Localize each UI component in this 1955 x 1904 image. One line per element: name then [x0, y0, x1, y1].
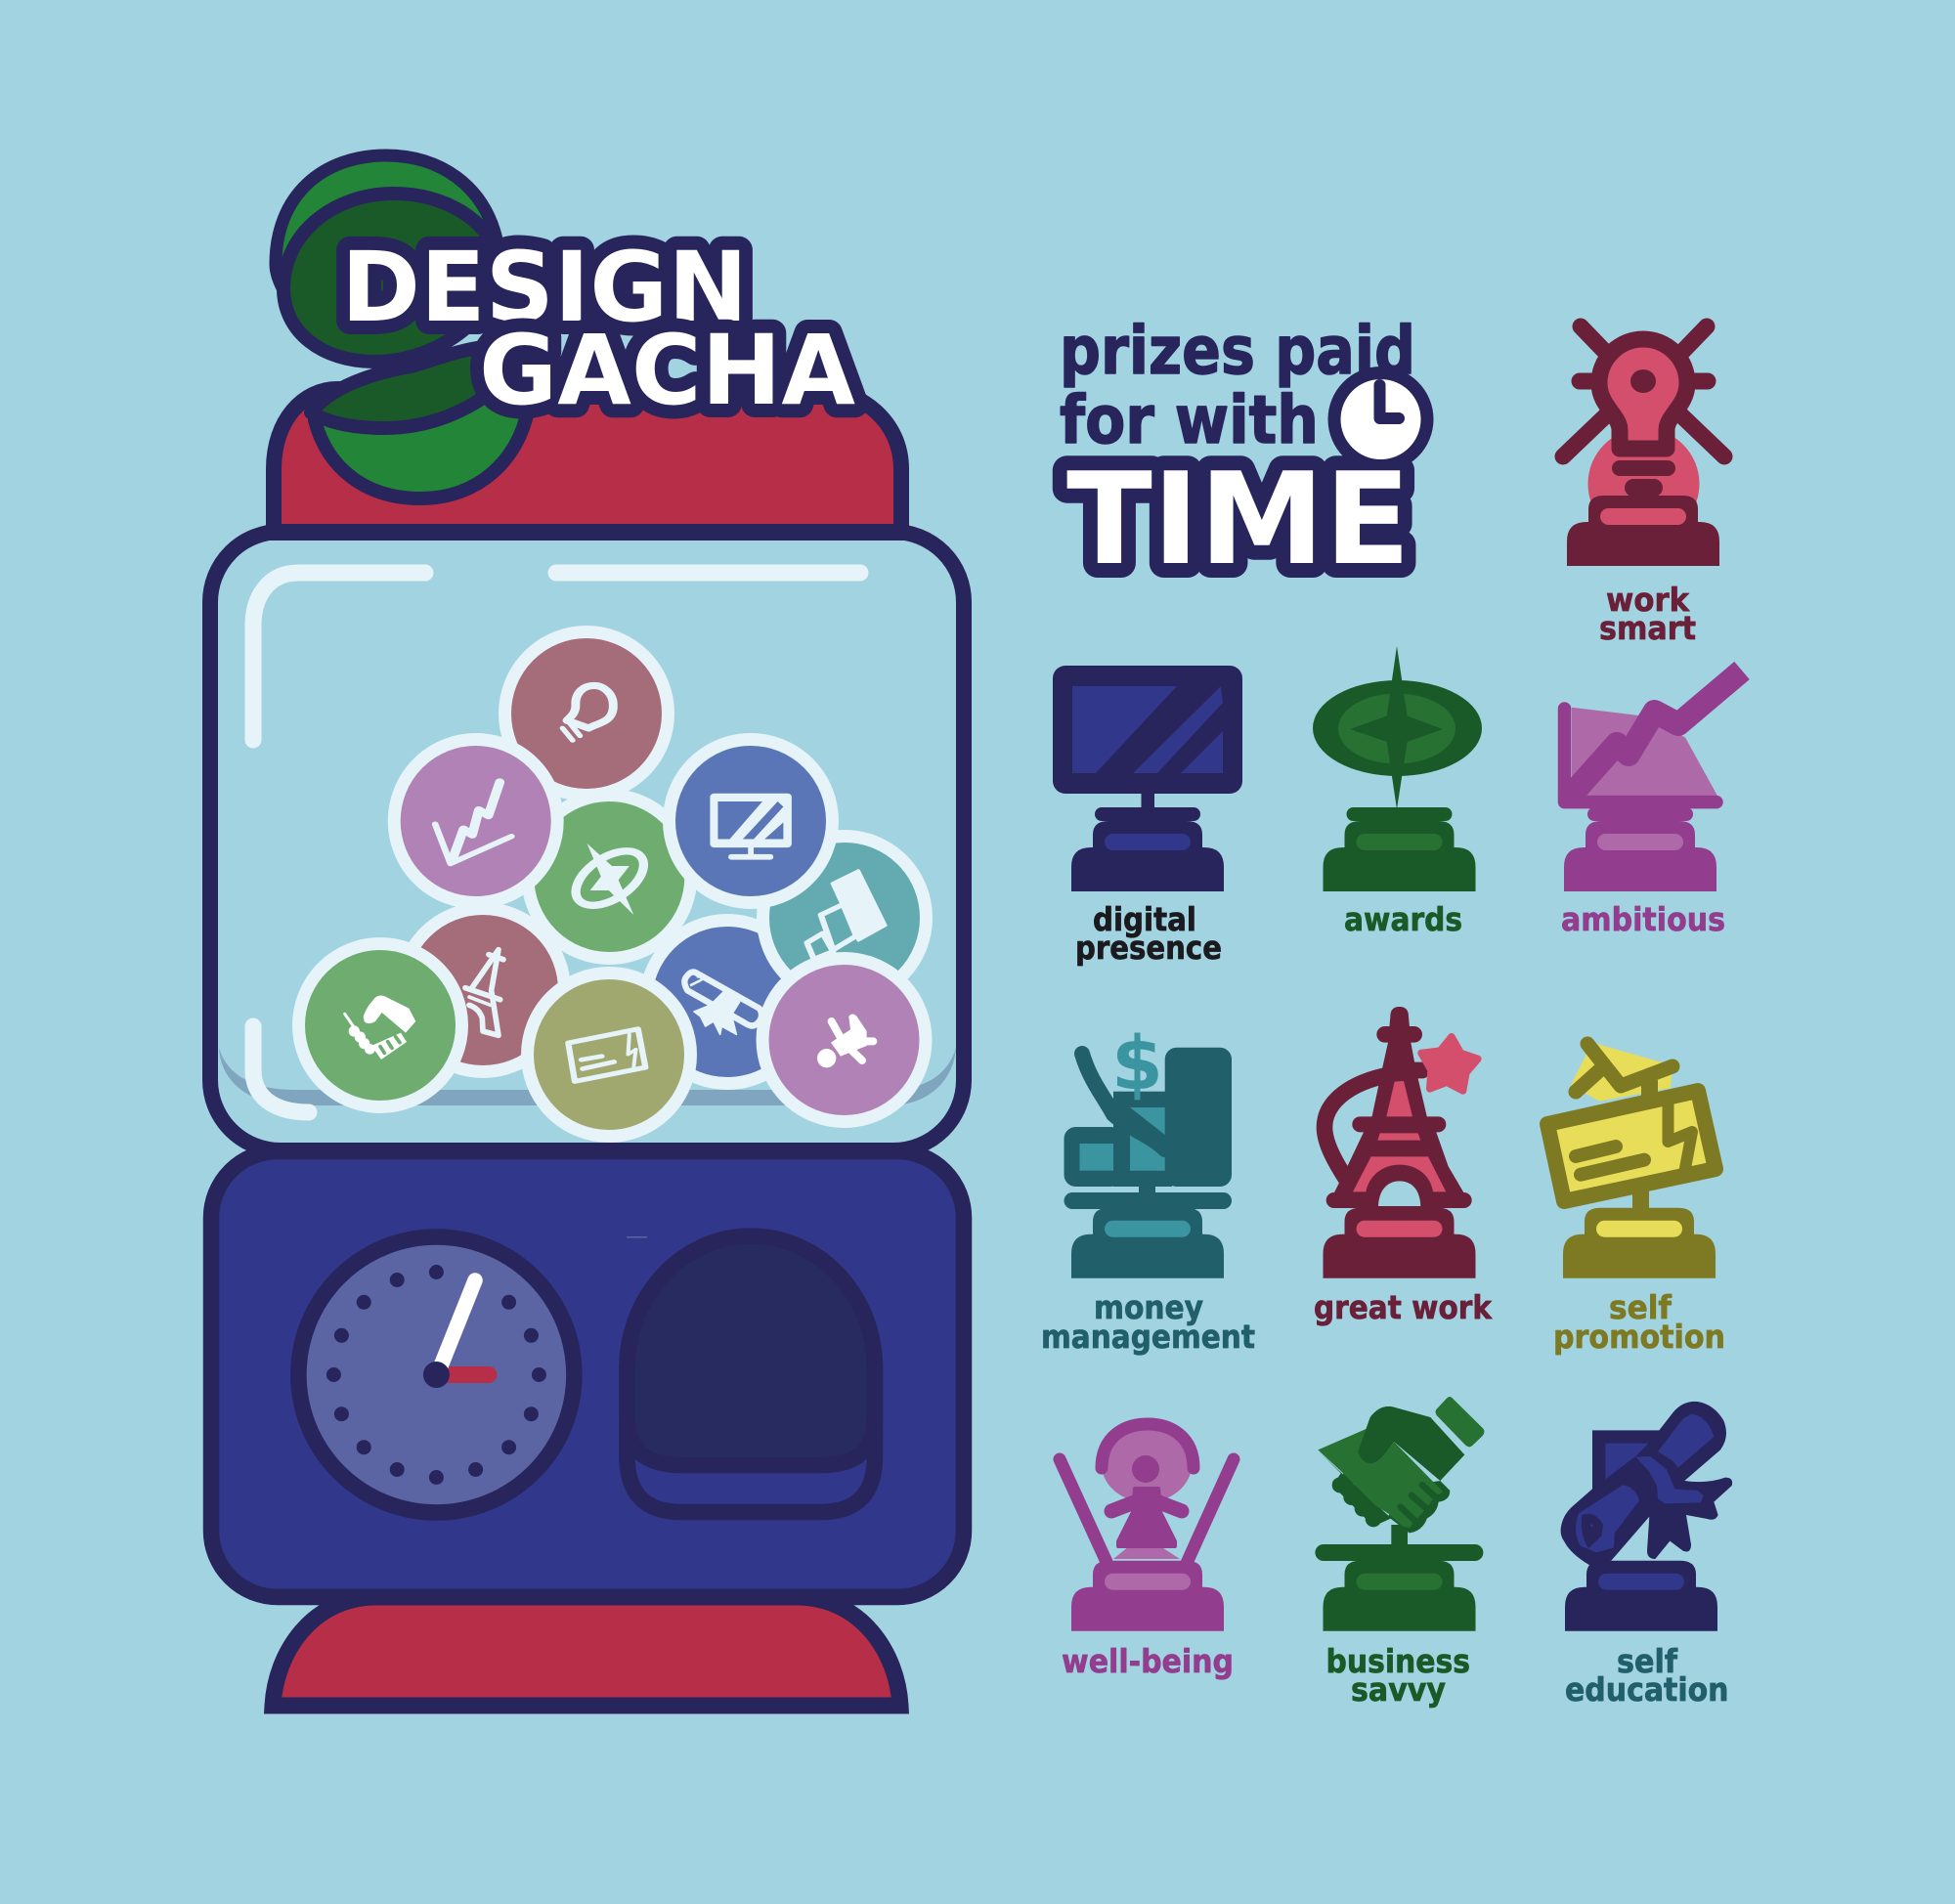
trophy: work smart	[1563, 326, 1724, 566]
label: work smart: work	[1606, 581, 1690, 619]
heading: prizes paid for with time	[1060, 313, 1433, 593]
label: self promotion: self	[1609, 1288, 1673, 1326]
machine body panel	[211, 1151, 964, 1597]
capsule: well-being figure	[762, 958, 926, 1122]
trophy: money management: $	[1111, 1019, 1163, 1106]
trophy: digital presence	[1053, 666, 1242, 891]
trophy: great work	[1324, 1007, 1478, 1278]
capsule: cheque	[528, 974, 690, 1136]
label: business savvy: savvy	[1351, 1670, 1446, 1709]
machine foot	[273, 1597, 900, 1706]
capsule: scroll	[645, 921, 809, 1083]
heading line 1: prizes paid	[1060, 313, 1415, 390]
label: money management: management	[1041, 1318, 1255, 1356]
glass highlights	[253, 573, 860, 1112]
capsule: eiffel tower	[401, 909, 565, 1071]
label: great work: great work	[1314, 1288, 1493, 1326]
prize slot	[628, 1236, 875, 1512]
capsule: lightbulb	[504, 631, 669, 796]
label: self education: education	[1565, 1670, 1728, 1709]
label: work smart	[1599, 581, 1696, 647]
capsule: handshake	[299, 944, 461, 1106]
heading word: time: TIME	[1066, 445, 1411, 593]
label: digital presence: presence	[1075, 929, 1222, 967]
icon: clock outline	[1327, 367, 1433, 472]
trophy: self education	[1561, 1402, 1732, 1631]
trophy: well-being	[1060, 1424, 1234, 1631]
label: self promotion	[1553, 1288, 1725, 1356]
heading line 2: for with	[1060, 382, 1319, 459]
label: self education: self	[1617, 1642, 1678, 1680]
capsule: monitor	[669, 739, 833, 903]
label: business savvy	[1325, 1642, 1470, 1709]
trophy: awards	[1313, 646, 1482, 891]
label: well-being: well-being	[1062, 1642, 1234, 1680]
clock dial	[298, 1237, 574, 1513]
gacha logo balls	[276, 155, 528, 498]
label: self education	[1565, 1642, 1728, 1709]
label: money management: money	[1094, 1288, 1203, 1326]
upper green ball	[276, 155, 499, 362]
trophy: money management	[1064, 1019, 1232, 1278]
lower green ball	[311, 347, 528, 498]
title: design gacha	[341, 232, 855, 427]
label: money management	[1041, 1288, 1255, 1356]
title word: design: DESIGN	[341, 232, 748, 344]
capsule: star award	[528, 796, 691, 958]
trophy: business savvy	[1315, 1397, 1485, 1631]
label: business savvy: business	[1325, 1642, 1470, 1680]
label: digital presence: digital	[1093, 900, 1196, 938]
title word: gacha: GACHA	[479, 315, 855, 427]
label: work smart: smart	[1599, 609, 1696, 647]
label: awards: awards	[1344, 900, 1462, 938]
machine top dome	[274, 389, 901, 533]
capsule: growth chart	[394, 739, 557, 903]
trophy: self promotion	[1547, 1043, 1716, 1278]
icon: clock face	[1341, 379, 1421, 459]
label: ambitious: ambitious	[1561, 900, 1725, 938]
glass dome outline	[210, 532, 964, 1150]
trophy: ambitious	[1564, 671, 1742, 891]
capsule: money chart	[762, 837, 927, 999]
label: self promotion: promotion	[1553, 1318, 1725, 1356]
gacha machine	[210, 389, 964, 1706]
label: digital presence	[1075, 900, 1222, 967]
glass floor shadow	[219, 1048, 956, 1105]
